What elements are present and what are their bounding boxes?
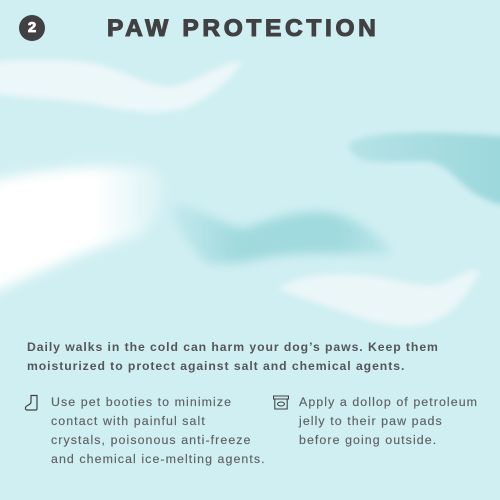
intro text (27, 340, 439, 373)
icon: dog bootie (24, 394, 38, 411)
brush stroke: center teal (172, 205, 393, 264)
title: PAW PROTECTION (107, 15, 380, 42)
tip: petroleum jelly (298, 395, 478, 447)
tip: booties: and chemical ice-melting agents. (51, 452, 266, 466)
number badge: 2 (28, 19, 36, 36)
tip: petroleum jelly: Apply a dollop of petroleum (299, 395, 478, 409)
tip: booties: crystals, poisonous anti-freeze (51, 433, 252, 447)
brush stroke: large white (0, 167, 163, 296)
tip: petroleum jelly: before going outside. (299, 433, 437, 447)
brush stroke: right teal (348, 133, 500, 207)
tip: booties: contact with painful salt (51, 414, 206, 428)
intro text: moisturized to protect against salt and chemical agents. (27, 359, 405, 373)
tip: booties: Use pet booties to minimize (51, 395, 232, 409)
number badge (19, 15, 45, 41)
tip: booties (51, 395, 266, 466)
intro text: Daily walks in the cold can harm your dog’s paws. Keep them (27, 340, 439, 354)
tip: petroleum jelly: jelly to their paw pads (299, 414, 443, 428)
brush stroke: bottom white (279, 271, 480, 326)
brush stroke: top white (0, 60, 242, 112)
icon: jar (273, 396, 289, 410)
